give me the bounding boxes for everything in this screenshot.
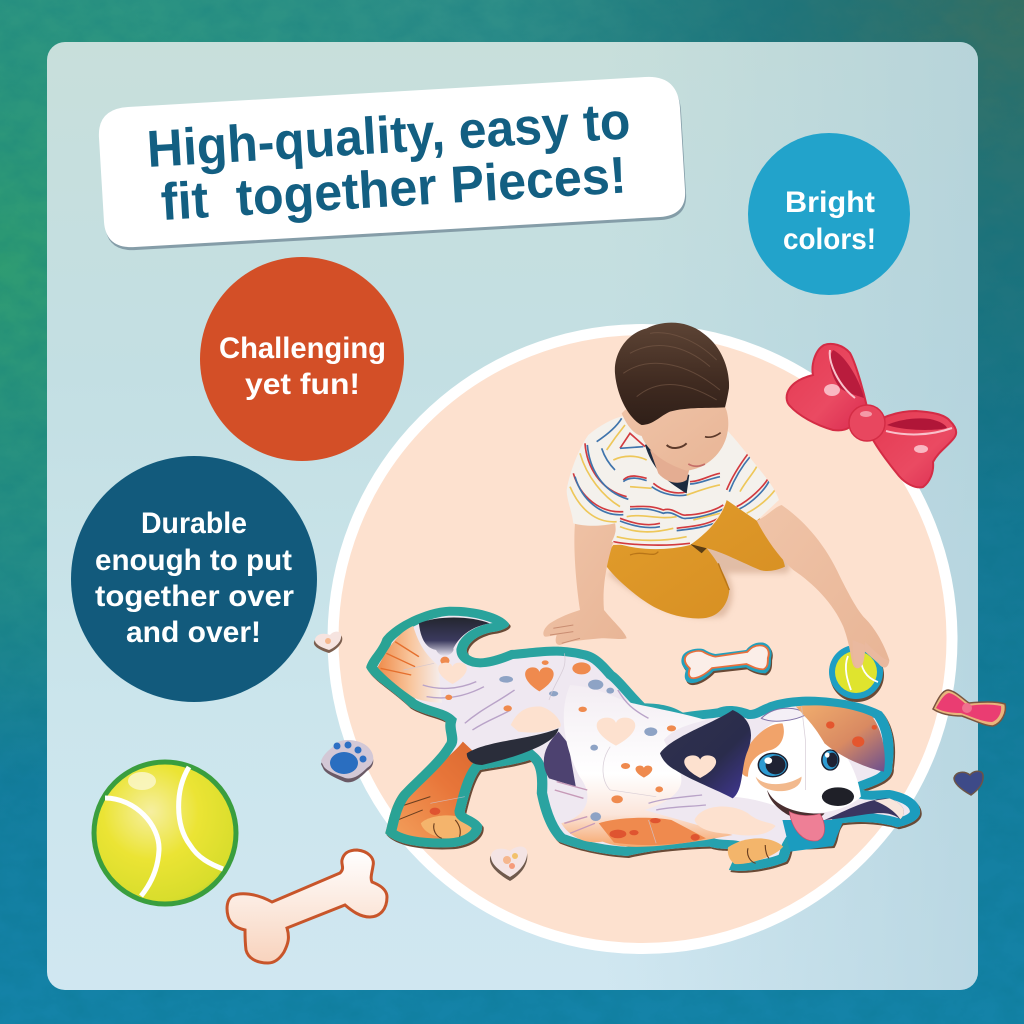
- dog tongue: [789, 812, 825, 841]
- dog mouth: [767, 790, 825, 819]
- icon: tennis ball: [94, 762, 236, 904]
- callout: durable: and over!: [126, 616, 261, 649]
- boy fingertip over ball: [853, 640, 889, 668]
- dog eyes: [758, 750, 839, 777]
- heading text: High-quality, easy to: [145, 92, 632, 179]
- icon: bone: [227, 850, 387, 963]
- dog left front paw: [728, 838, 783, 864]
- tail: [378, 617, 490, 703]
- callout: durable: [71, 456, 317, 702]
- dog rear leg: [385, 742, 473, 840]
- dog nose: [822, 787, 854, 806]
- heading card: [99, 77, 686, 250]
- boy hair: [615, 323, 729, 425]
- callout: challenging yet fun: [200, 257, 404, 461]
- peach circle with white ring: [333, 330, 952, 948]
- boy: [543, 323, 889, 668]
- callout: bright colors: colors!: [783, 223, 876, 256]
- boy right arm: [757, 505, 889, 668]
- heading text: fit together Pieces!: [159, 146, 628, 232]
- teal patch under tongue: [782, 820, 844, 852]
- dog front body: [465, 685, 733, 847]
- puzzle bone piece: [681, 642, 773, 685]
- boy shadow: [607, 540, 790, 618]
- dog right front paw: [825, 798, 904, 820]
- dog puzzle holes: [438, 663, 776, 835]
- dog left ear: [660, 710, 751, 798]
- callout: challenging yet fun: Challenging: [219, 332, 386, 365]
- callout: bright colors: [748, 133, 910, 295]
- callout: bright colors: Bright: [785, 186, 875, 219]
- callout: durable: together over: [95, 580, 294, 613]
- puzzle ball piece: [829, 645, 884, 702]
- heading text: [145, 92, 632, 232]
- callout: durable: enough to put: [95, 544, 292, 577]
- dog inner hind leg: [544, 732, 576, 787]
- icon: small pink bow piece: [933, 690, 1005, 726]
- dog puzzle seams: [404, 653, 805, 843]
- icon: paw piece: [321, 740, 373, 782]
- icon: red bow: [787, 344, 956, 487]
- callout: durable: Durable: [141, 507, 247, 540]
- dog dark belly: [467, 728, 559, 765]
- dog right ear: [796, 705, 885, 772]
- icon: small navy heart piece: [954, 771, 983, 795]
- boy collar: [645, 442, 689, 493]
- boy face and neck: [622, 393, 728, 483]
- dog head: [660, 705, 885, 841]
- dog board with teal edge: [366, 607, 922, 873]
- callout: challenging yet fun: yet fun!: [245, 368, 360, 401]
- dog spots: [430, 657, 700, 841]
- boy left arm: [543, 523, 627, 645]
- icon: small heart piece near dog: [490, 846, 527, 881]
- boy shirt: [567, 416, 779, 549]
- puzzle dog: [366, 607, 922, 873]
- boy trousers: [607, 500, 785, 618]
- icon: small heart piece: [314, 632, 342, 653]
